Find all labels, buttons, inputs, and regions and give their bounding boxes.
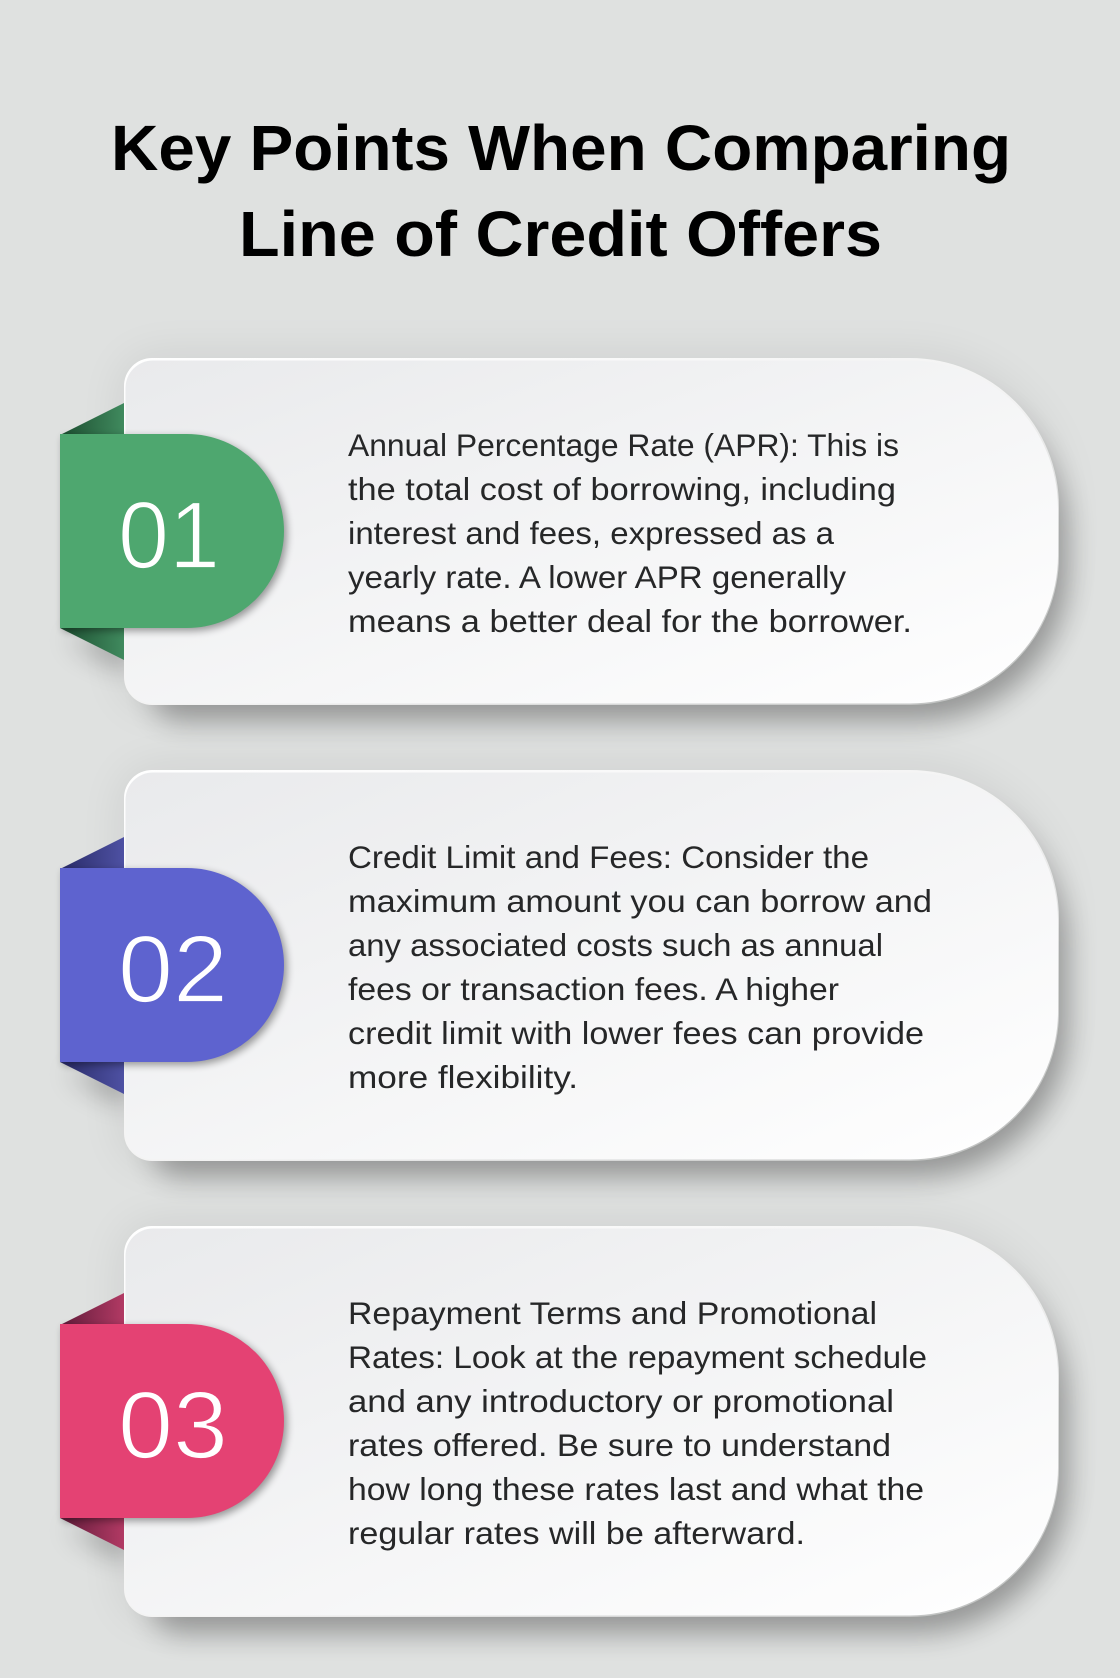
panel: step 02	[60, 770, 1067, 1177]
text block 02	[348, 839, 932, 1095]
badge 02: 02	[118, 916, 228, 1023]
text block 02: maximum amount you can borrow and	[348, 883, 932, 919]
badge 01	[60, 434, 287, 631]
ribbon fold bottom	[60, 1518, 124, 1550]
panel: step 01	[60, 358, 1067, 721]
card	[124, 1226, 1059, 1617]
text block 03: how long these rates last and what the	[348, 1471, 924, 1507]
text block 03: rates offered. Be sure to understand	[348, 1427, 891, 1463]
text block 02: Credit Limit and Fees: Consider the	[348, 839, 869, 875]
title	[111, 112, 1011, 270]
text block 03: regular rates will be afterward.	[348, 1515, 805, 1551]
card	[124, 358, 1059, 705]
card	[124, 770, 1059, 1161]
text block 01	[348, 427, 912, 639]
text block 03: Repayment Terms and Promotional	[348, 1295, 877, 1331]
text block 01: the total cost of borrowing, including	[348, 471, 896, 507]
title: Line of Credit Offers	[239, 198, 882, 270]
text block 01: interest and fees, expressed as a	[348, 515, 834, 551]
text block 01: yearly rate. A lower APR generally	[348, 559, 846, 595]
text block 02: credit limit with lower fees can provide	[348, 1015, 924, 1051]
title: Key Points When Comparing	[111, 112, 1011, 184]
ribbon fold bottom	[60, 1062, 124, 1094]
text block 02: fees or transaction fees. A higher	[348, 971, 839, 1007]
ribbon fold top	[62, 1293, 124, 1324]
ribbon fold top	[62, 837, 124, 868]
text block 02: any associated costs such as annual	[348, 927, 883, 963]
text block 01: means a better deal for the borrower.	[348, 603, 912, 639]
badge 03: 03	[118, 1372, 228, 1479]
ribbon fold bottom	[60, 628, 124, 660]
panel: step 03	[60, 1226, 1067, 1633]
badge 01: 01	[118, 482, 220, 589]
text block 01: Annual Percentage Rate (APR): This is	[348, 427, 899, 463]
text block 03: and any introductory or promotional	[348, 1383, 894, 1419]
text block 03	[348, 1295, 927, 1551]
badge 02	[60, 868, 287, 1065]
ribbon fold top	[62, 403, 124, 434]
badge 03	[60, 1324, 287, 1521]
text block 03: Rates: Look at the repayment schedule	[348, 1339, 927, 1375]
text block 02: more flexibility.	[348, 1059, 578, 1095]
